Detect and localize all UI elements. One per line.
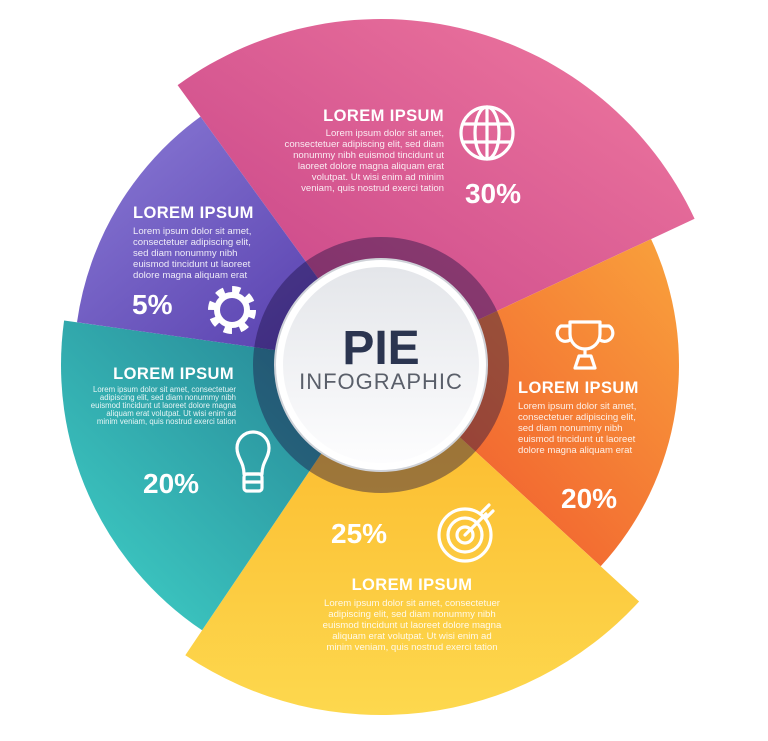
teal text block: LOREM IPSUM [113,365,234,383]
teal text block: minim veniam, quis nostrud exerci tation [97,417,236,426]
icon: light bulb [237,432,269,491]
segment: yellow 25% [185,365,639,715]
yellow text block: minim veniam, quis nostrud exerci tation [326,642,498,653]
pink text block: Lorem ipsum dolor sit amet, [326,128,444,139]
pink percentage: 30% [465,178,521,209]
yellow text block: LOREM IPSUM [352,576,472,594]
orange text block: LOREM IPSUM [518,379,639,397]
teal text block: adipiscing elit, sed diam nonummy nibh [100,393,236,402]
center title: PIE [342,322,420,375]
yellow text block: euismod tincidunt ut laoreet dolore magna [323,620,502,631]
purple text block: LOREM IPSUM [133,204,254,222]
orange text block: euismod tincidunt ut laoreet [518,434,636,445]
icon: globe [461,107,513,159]
purple percentage: 5% [132,289,173,320]
segment: pink 30% [178,19,695,365]
segment: purple 5% [77,117,381,365]
purple text block: Lorem ipsum dolor sit amet, [133,226,251,237]
teal percentage: 20% [143,468,199,499]
pink text block: LOREM IPSUM [323,107,444,125]
purple text block: consectetuer adipiscing elit, [133,237,251,248]
purple text block: dolore magna aliquam erat [133,270,247,281]
center badge [275,259,487,471]
purple text block [133,204,254,281]
orange text block [518,379,639,456]
purple text block: euismod tincidunt ut laoreet [133,259,251,270]
pink text block: laoreet dolore magna aliquam erat [298,161,444,172]
icon: gear [212,290,252,330]
center subtitle: INFOGRAPHIC [299,369,463,394]
orange text block: dolore magna aliquam erat [518,445,632,456]
segment: orange 20% [381,239,679,566]
orange text block: sed diam nonummy nibh [518,423,623,434]
yellow text block: adipiscing elit, sed diam nonummy nibh [328,609,496,620]
segment: teal 20% [61,320,381,630]
yellow percentage: 25% [331,518,387,549]
icon: trophy [557,322,613,368]
teal text block: euismod tincidunt ut laoreet dolore magna [91,401,237,410]
pink text block [285,107,444,194]
teal text block [91,365,237,426]
pink text block: volutpat. Ut wisi enim ad minim [312,172,444,183]
yellow text block: Lorem ipsum dolor sit amet, consectetuer [324,598,501,609]
orange percentage: 20% [561,483,617,514]
pink text block: consectetuer adipiscing elit, sed diam [285,139,444,150]
center ring [264,248,498,482]
purple text block: sed diam nonummy nibh [133,248,238,259]
orange text block: Lorem ipsum dolor sit amet, [518,401,636,412]
teal text block: Lorem ipsum dolor sit amet, consectetuer [93,385,236,394]
orange text block: consectetuer adipiscing elit, [518,412,636,423]
icon: target [439,505,493,561]
yellow text block: aliquam erat volutpat. Ut wisi enim ad [332,631,492,642]
pink text block: veniam, quis nostrud exerci tation [301,183,444,194]
pink text block: nonummy nibh euismod tincidunt ut [293,150,444,161]
yellow text block [323,576,502,653]
teal text block: aliquam erat volutpat. Ut wisi enim ad [106,409,236,418]
